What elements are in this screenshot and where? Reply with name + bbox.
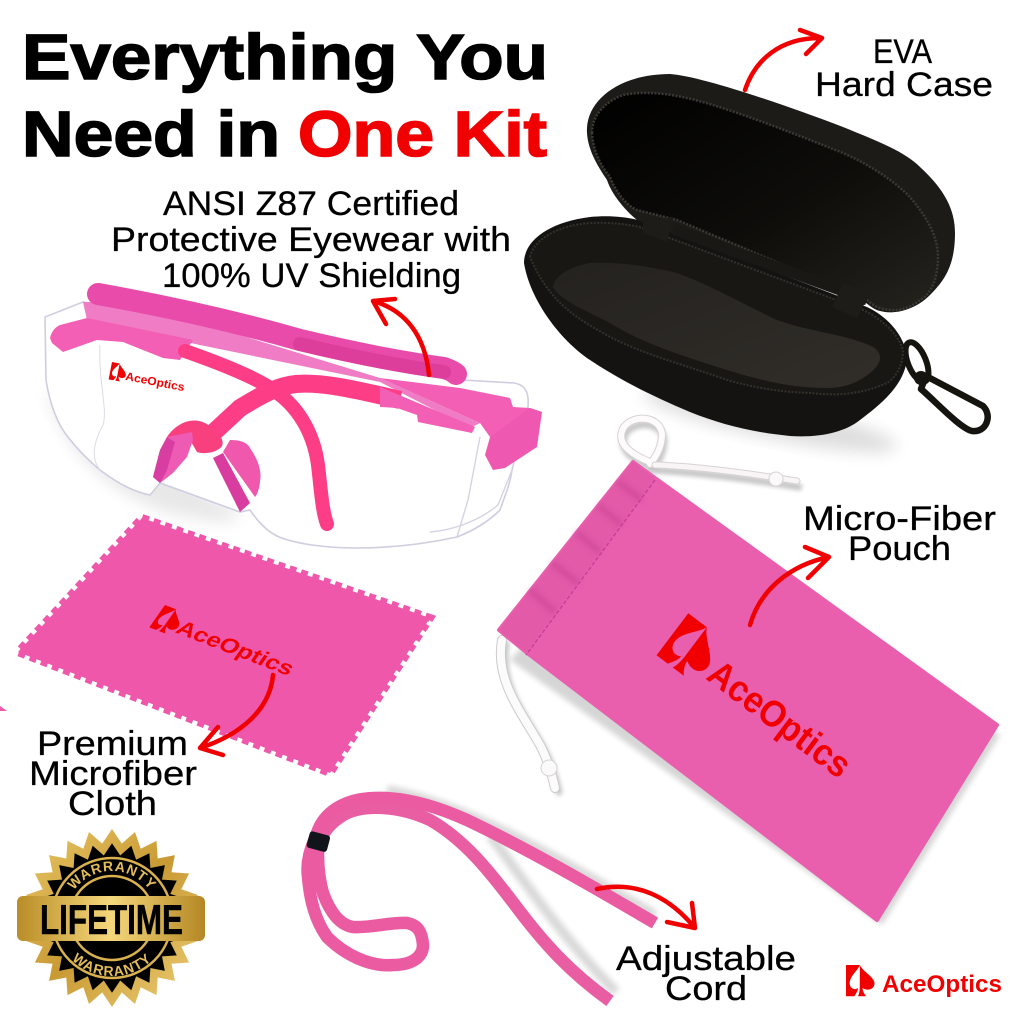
hinge (485, 408, 542, 470)
left arm piece (50, 318, 193, 360)
badge lifetime text: LIFETIME (40, 896, 183, 943)
title: One Kit (298, 98, 547, 170)
lifetime warranty badge (17, 829, 205, 1007)
cloth tiny corner (0, 706, 7, 711)
bar darker shading (300, 344, 444, 372)
label: cloth: Microfiber (29, 755, 197, 793)
cord shadow (387, 790, 655, 992)
cloth logo (149, 605, 301, 680)
cord strand one (307, 798, 655, 965)
pouch logo (657, 613, 865, 788)
pouch logo: AceOptics (700, 652, 859, 786)
cord strand two (323, 808, 610, 1001)
pouch gathered top (499, 462, 655, 655)
badge gold starburst (20, 826, 204, 1010)
arrow: cord (597, 887, 695, 928)
left nose pad (153, 432, 193, 483)
lower right band (380, 387, 475, 433)
badge ribbon (17, 896, 205, 941)
badge rings (52, 858, 172, 978)
title: Need in (22, 98, 280, 170)
label: cloth (29, 725, 197, 823)
label: cord: Adjustable (616, 940, 796, 978)
label: cord: Cord (665, 970, 747, 1008)
arrow: eyewear (373, 299, 429, 375)
upper right band (380, 378, 542, 437)
title: Everything You (22, 21, 548, 93)
badge black starburst (37, 843, 187, 993)
arrow: pouch (750, 547, 829, 625)
arrow: case (745, 30, 822, 90)
hard case (524, 74, 988, 465)
case floor (553, 263, 880, 388)
label: cord (616, 940, 796, 1008)
case lower shell (524, 216, 907, 436)
pouch body (499, 462, 997, 920)
eyewear logo: AceOptics (124, 371, 185, 394)
label: pouch (803, 500, 996, 568)
light band under bar (83, 302, 480, 428)
label: protective eyewear: 100% UV Shielding (162, 257, 461, 295)
eyewear logo (109, 362, 187, 394)
label: protective eyewear: ANSI Z87 Certified (163, 185, 459, 223)
label: pouch: Pouch (848, 530, 951, 568)
case lid (587, 74, 955, 312)
cord stopper (306, 831, 331, 853)
right nose pad (223, 440, 261, 497)
title (22, 21, 548, 170)
label: cloth: Premium (37, 725, 188, 763)
microfiber cloth (0, 518, 430, 773)
adjustable cord (306, 790, 655, 1001)
case hinge (673, 229, 867, 300)
pouch shadow (510, 490, 1000, 925)
pouch drawstrings (501, 419, 799, 792)
temple arm one (185, 351, 327, 524)
lens (45, 302, 528, 548)
label: hard case (815, 33, 993, 104)
arrow: cloth (200, 675, 273, 755)
case clip (901, 339, 988, 431)
nose bridge (167, 421, 223, 453)
top bar (98, 294, 456, 374)
brand logo (846, 965, 1002, 998)
cloth logo: AceOptics (171, 616, 299, 680)
cloth body (18, 518, 430, 773)
eyewear (45, 294, 542, 548)
badge warranty bottom: WARRANTY (74, 952, 149, 976)
label: hard case: EVA (873, 33, 932, 71)
label: protective eyewear: Protective Eyewear with (111, 221, 511, 259)
pouch (499, 419, 1000, 925)
label: cloth: Cloth (68, 785, 157, 823)
label: pouch: Micro-Fiber (803, 500, 996, 538)
eyewear shadows (45, 390, 353, 528)
label: hard case: Hard Case (815, 66, 993, 104)
temple arm two (212, 384, 400, 434)
brand logo: AceOptics (882, 971, 1002, 998)
badge warranty top: WARRANTY (66, 862, 157, 888)
right nose strip (213, 453, 250, 512)
label: protective eyewear (111, 185, 511, 295)
